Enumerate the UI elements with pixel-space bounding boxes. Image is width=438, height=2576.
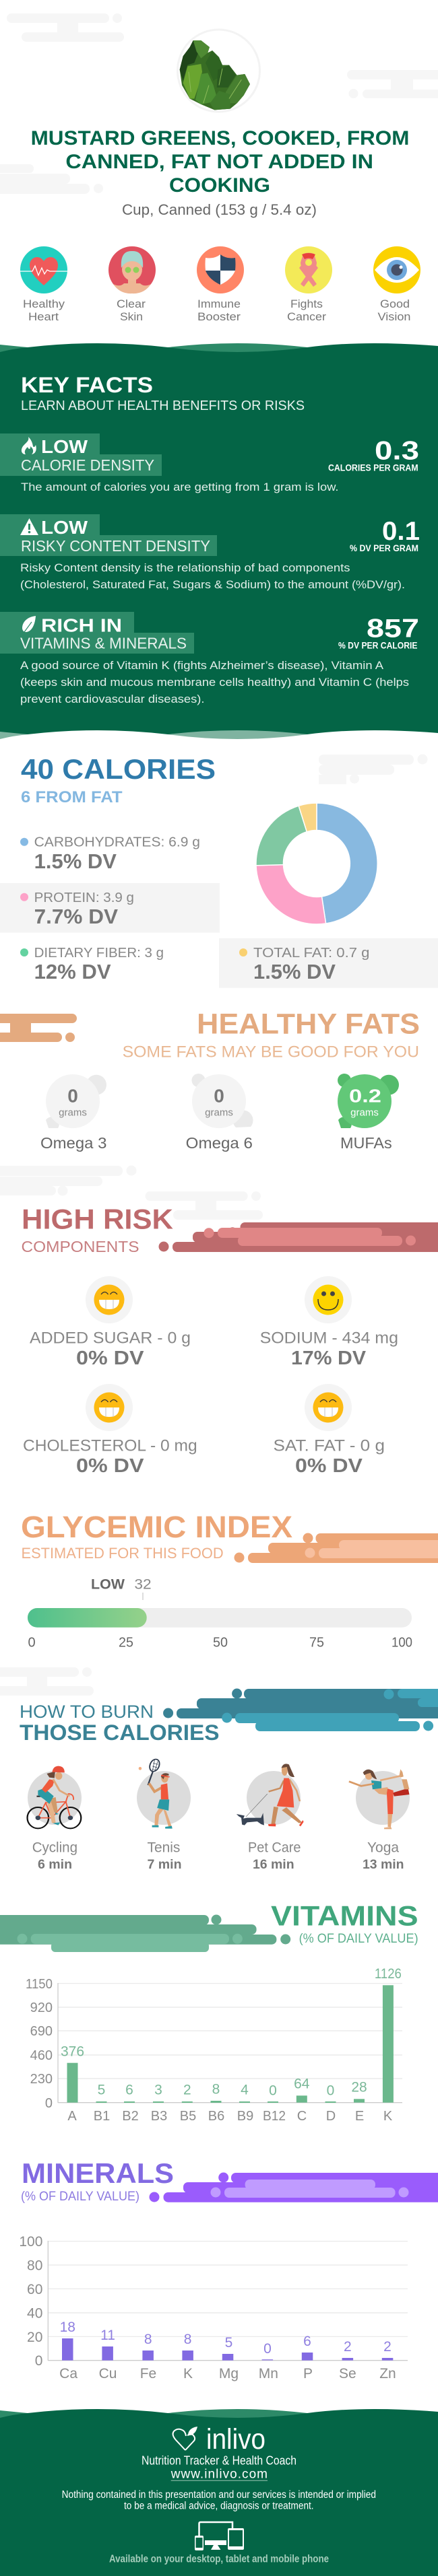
heading: high risk [22, 1204, 173, 1255]
banner: glycemic index [234, 1533, 438, 1563]
heading: healthy fats [123, 1008, 420, 1061]
legend: total fat [219, 938, 438, 988]
bar chart: vitamins: C [297, 2109, 307, 2124]
chart: glycemic index gauge: 32 [134, 1577, 152, 1593]
bar chart: vitamins: A [67, 2109, 77, 2124]
fact: rich in vitamins and minerals: prevent cardiovascular diseases). [20, 693, 205, 705]
banner: minerals [150, 2173, 438, 2202]
icon: immune booster: Immune [197, 298, 241, 310]
risk item: sodium [260, 1276, 398, 1369]
bar chart: minerals: Fe [140, 2366, 156, 2381]
bar chart: vitamins: 2 [183, 2083, 191, 2098]
fact: rich in vitamins and minerals: (keeps skin and mucous membrane cells healthy) and Vitamin C (helps [20, 676, 409, 689]
risk item: cholesterol [23, 1384, 197, 1477]
bar chart: vitamins: D [326, 2109, 336, 2124]
activity: cycling: 6 min [38, 1858, 72, 1872]
title: COOKING [169, 174, 270, 197]
heading: high risk: HIGH RISK [22, 1204, 173, 1235]
bar chart: minerals: 100 [19, 2234, 42, 2250]
bar chart: minerals: 5 [225, 2335, 232, 2351]
legend: protein: PROTEIN: 3.9 g [34, 891, 134, 905]
stat: MUFAs: 0.2 [349, 1086, 381, 1107]
bar chart: vitamins: 4 [241, 2083, 249, 2098]
bar chart: minerals: 8 [184, 2332, 191, 2347]
bar chart: minerals: 18 [60, 2320, 75, 2335]
legend: protein [0, 883, 220, 933]
fact: low risky content density: 0.1 [382, 517, 420, 546]
risk item: added sugar: ADDED SUGAR - 0 g [30, 1329, 191, 1348]
icon: immune booster: Booster [197, 310, 241, 323]
risk item: sodium: SODIUM - 434 mg [260, 1329, 398, 1348]
availability note: Available on your desktop, tablet and mobile phone [109, 2554, 329, 2565]
risk item: saturated fat [274, 1384, 385, 1477]
bar chart: vitamins: 690 [30, 2024, 53, 2039]
bar chart: vitamins: B1 [94, 2109, 110, 2124]
title: CANNED, FAT NOT ADDED IN [65, 151, 373, 173]
heading: key facts: KEY FACTS [21, 373, 153, 397]
fact: low risky content density: RISKY CONTENT DENSITY [21, 537, 210, 555]
bar chart: vitamins: 460 [30, 2048, 53, 2063]
fact: rich in vitamins and minerals: RICH IN [41, 615, 122, 636]
donut chart: macronutrients [256, 803, 377, 924]
bar chart: minerals: K [183, 2366, 193, 2381]
stat: omega 3: grams [59, 1107, 87, 1119]
bar chart: minerals: 0 [263, 2341, 272, 2357]
bar chart: minerals: 2 [344, 2339, 352, 2355]
bar chart: vitamins: 1150 [26, 1977, 53, 1992]
fact: low calorie density: CALORIES PER GRAM [328, 463, 418, 473]
bar chart: vitamins: 920 [30, 2000, 53, 2015]
fact: rich in vitamins and minerals: A good source of Vitamin K (fights Alzheimer’s disease), Vitamin A [20, 659, 384, 672]
activity: pet care: 16 min [253, 1858, 294, 1872]
heading: healthy fats: SOME FATS MAY BE GOOD FOR YOU [123, 1043, 419, 1061]
bar chart: vitamins: K [383, 2109, 393, 2124]
bar chart: minerals [19, 2234, 408, 2381]
bar chart: vitamins: B2 [122, 2109, 139, 2124]
risk item: cholesterol: CHOLESTEROL - 0 mg [23, 1437, 197, 1455]
tagline and website [142, 2454, 296, 2482]
heading: minerals: MINERALS [22, 2157, 174, 2189]
icon: good vision: Vision [377, 310, 411, 323]
fact: low risky content density: LOW [41, 517, 88, 538]
bar chart: minerals: Cu [99, 2366, 117, 2381]
legend: protein: 7.7% DV [34, 905, 118, 928]
bar chart: minerals: Mn [259, 2366, 278, 2381]
stat: omega 6: grams [205, 1107, 233, 1119]
risk item: added sugar: 0% DV [76, 1348, 144, 1369]
heading: how to burn those calories [20, 1702, 220, 1745]
disclaimer: Nothing contained in this presentation and our services is intended or implied [62, 2489, 376, 2501]
bar chart: minerals: Ca [59, 2366, 77, 2381]
legend: total fat: TOTAL FAT: 0.7 g [253, 946, 369, 961]
icon: fights cancer: Fights [290, 298, 323, 310]
heading: key facts [21, 373, 305, 413]
heading: vitamins: VITAMINS [271, 1900, 418, 1932]
heading: glycemic index: GLYCEMIC INDEX [21, 1510, 292, 1544]
bar chart: vitamins: B3 [151, 2109, 167, 2124]
bar chart: vitamins: 1126 [375, 1966, 402, 1982]
fact: low risky content density: (Cholesterol, Saturated Fat, Sugars & Sodium) to the amount (%DV/gr). [20, 578, 405, 591]
activity: pet care [237, 1764, 304, 1872]
legend: dietary fiber: DIETARY FIBER: 3 g [34, 946, 164, 961]
chart: glycemic index gauge: 50 [213, 1636, 228, 1650]
bar chart: vitamins: 0 [269, 2083, 277, 2099]
fact: low calorie density [0, 433, 419, 493]
legend: carbohydrates: CARBOHYDRATES: 6.9 g [34, 835, 200, 850]
fact: low risky content density [0, 514, 420, 591]
benefit icons row [20, 246, 420, 323]
bar chart: minerals: P [303, 2366, 313, 2381]
stat: omega 6 [186, 1074, 253, 1152]
bar chart: minerals: Zn [379, 2366, 396, 2381]
heading: glycemic index [21, 1510, 292, 1562]
panel: key facts [0, 343, 438, 750]
activity: yoga: Yoga [367, 1840, 399, 1856]
title: MUSTARD GREENS, COOKED, FROM [31, 127, 409, 149]
chart: glycemic index gauge: 100 [392, 1636, 412, 1650]
banner: how to burn [163, 1688, 438, 1731]
activity: cycling: Cycling [32, 1840, 77, 1856]
bar chart: minerals: 20 [27, 2330, 42, 2345]
bar chart: minerals: 60 [27, 2282, 42, 2297]
bar chart: minerals: 11 [100, 2328, 115, 2343]
risk item: sodium: 17% DV [291, 1348, 367, 1369]
activity: tennis: 7 min [147, 1858, 182, 1872]
fact: rich in vitamins and minerals: 857 [367, 614, 419, 643]
heading: minerals: (% OF DAILY VALUE) [21, 2190, 139, 2204]
tagline and website: www.inlivo.com [170, 2468, 268, 2482]
logo: inlivo [173, 2423, 265, 2456]
legend: total fat: 1.5% DV [253, 960, 336, 983]
icon: good vision: Good [380, 298, 410, 310]
bar chart: minerals: 80 [27, 2258, 42, 2274]
bar chart: minerals: 2 [383, 2339, 392, 2355]
stat: MUFAs [338, 1074, 399, 1152]
stat: omega 6: 0 [214, 1086, 224, 1107]
legend: carbohydrates [20, 835, 200, 873]
bar chart: vitamins: 6 [125, 2083, 133, 2098]
banner: healthy fats [0, 1014, 77, 1042]
fact: rich in vitamins and minerals: % DV PER CALORIE [338, 641, 418, 650]
heading: healthy fats: HEALTHY FATS [197, 1008, 420, 1041]
bar chart: vitamins: 0 [45, 2096, 53, 2111]
heading: key facts: LEARN ABOUT HEALTH BENEFITS OR RISKS [21, 398, 305, 413]
chart: glycemic index gauge: 75 [309, 1636, 324, 1650]
bar chart: vitamins [26, 1966, 402, 2124]
stat: omega 3: 0 [67, 1086, 78, 1107]
bar chart: vitamins: 0 [327, 2083, 334, 2099]
bar chart: vitamins: 5 [98, 2083, 105, 2098]
activity: yoga: 13 min [363, 1858, 404, 1872]
fact: low calorie density: CALORIE DENSITY [21, 456, 154, 474]
heading: glycemic index: ESTIMATED FOR THIS FOOD [22, 1545, 224, 1562]
risk item: saturated fat: 0% DV [295, 1455, 363, 1477]
bar chart: minerals: Mg [219, 2366, 239, 2381]
activity: tennis [137, 1758, 191, 1872]
disclaimer: to be a medical advice, diagnosis or treatment. [124, 2501, 314, 2512]
bar chart: vitamins: 376 [61, 2044, 84, 2059]
stat: omega 3: Omega 3 [40, 1134, 106, 1152]
icon: healthy heart: Heart [28, 310, 59, 323]
chart: glycemic index gauge: 0 [28, 1636, 36, 1650]
icon: healthy heart: Healthy [23, 298, 65, 310]
risk item: saturated fat: SAT. FAT - 0 g [274, 1437, 385, 1455]
icon: good vision [373, 246, 420, 323]
fact: low calorie density: 0.3 [375, 436, 419, 466]
activity: yoga [349, 1769, 410, 1872]
tagline and website: Nutrition Tracker & Health Coach [142, 2454, 296, 2468]
bar chart: minerals: 40 [27, 2306, 42, 2321]
fact: rich in vitamins and minerals: VITAMINS & MINERALS [20, 634, 187, 652]
heading: calories [21, 753, 216, 806]
banner: high risk [159, 1222, 438, 1252]
icon: clear skin: Skin [120, 310, 143, 323]
title [31, 127, 409, 197]
bar chart: minerals: 8 [144, 2332, 152, 2347]
fact: low risky content density: % DV PER GRAM [350, 543, 418, 553]
heading: vitamins: (% OF DAILY VALUE) [299, 1932, 418, 1946]
icon: clear skin: Clear [117, 298, 146, 310]
bar chart: vitamins: B9 [237, 2109, 253, 2124]
chart: glycemic index gauge: LOW [91, 1577, 125, 1593]
serving size: Cup, Canned (153 g / 5.4 oz) [122, 201, 317, 218]
bar chart: vitamins: 64 [294, 2077, 310, 2092]
icon: immune booster [197, 246, 244, 323]
legend: carbohydrates: 1.5% DV [34, 849, 117, 873]
bar chart: vitamins: 230 [30, 2072, 53, 2087]
risk item: added sugar [30, 1276, 191, 1369]
chart: glycemic index gauge: 25 [119, 1636, 133, 1650]
stat: MUFAs: MUFAs [340, 1134, 392, 1152]
bar chart: vitamins: 8 [212, 2082, 220, 2097]
stat: MUFAs: grams [350, 1107, 379, 1119]
panel: footer [0, 2409, 438, 2576]
activity: tennis: Tenis [147, 1840, 180, 1856]
heading: minerals [21, 2157, 174, 2204]
fact: rich in vitamins and minerals [0, 612, 419, 705]
stat: omega 3 [40, 1074, 106, 1152]
bar chart: vitamins: 28 [351, 2080, 367, 2095]
food image: mustard greens [178, 30, 260, 112]
heading: calories: 6 FROM FAT [21, 788, 123, 806]
heading: vitamins [271, 1900, 418, 1946]
activity: cycling [28, 1766, 82, 1872]
bar chart: minerals: 6 [303, 2334, 311, 2349]
fact: low calorie density: LOW [41, 436, 88, 457]
icon: devices [195, 2522, 244, 2550]
bar chart: vitamins: B5 [180, 2109, 196, 2124]
heading: high risk: COMPONENTS [22, 1238, 139, 1255]
icon: fights cancer [285, 246, 332, 323]
heading: how to burn those calories: HOW TO BURN [20, 1702, 154, 1722]
risk item: cholesterol: 0% DV [76, 1455, 144, 1477]
fact: low risky content density: Risky Content density is the relationship of bad components [20, 561, 350, 574]
logo: inlivo: inlivo [206, 2423, 265, 2456]
stat: omega 6: Omega 6 [186, 1134, 253, 1152]
icon: clear skin [108, 246, 156, 323]
bar chart: vitamins: B12 [263, 2109, 286, 2124]
legend: dietary fiber: 12% DV [34, 960, 111, 983]
bar chart: minerals: 0 [35, 2353, 42, 2369]
heading: calories: 40 CALORIES [21, 753, 216, 785]
chart: glycemic index gauge [28, 1577, 412, 1650]
bar chart: vitamins: B6 [208, 2109, 224, 2124]
heading: how to burn those calories: THOSE CALORIES [20, 1720, 220, 1745]
bar chart: vitamins: E [355, 2109, 364, 2124]
disclaimer [62, 2489, 376, 2512]
icon: healthy heart [20, 246, 67, 323]
legend: dietary fiber [20, 946, 164, 983]
banner: vitamins [0, 1914, 290, 1952]
icon: fights cancer: Cancer [287, 310, 326, 323]
fact: low calorie density: The amount of calories you are getting from 1 gram is low. [21, 481, 339, 493]
activity: pet care: Pet Care [248, 1840, 301, 1856]
bar chart: vitamins: 3 [154, 2083, 162, 2098]
bar chart: minerals: Se [339, 2366, 356, 2381]
